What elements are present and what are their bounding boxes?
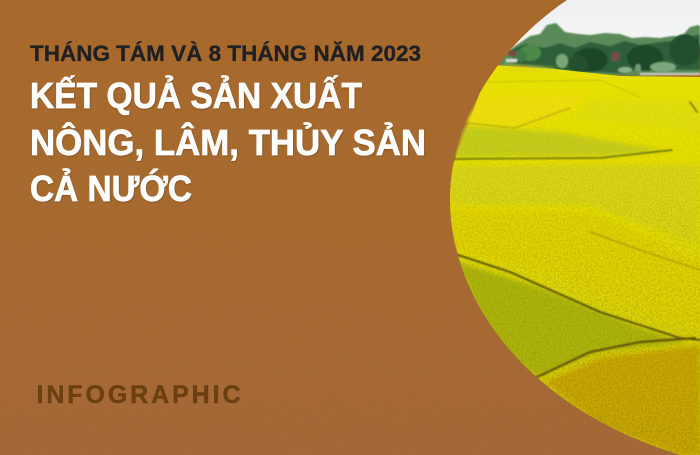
tree line [500, 23, 700, 76]
rice field photo in curved frame [440, 0, 700, 455]
field base [440, 65, 700, 455]
infographic label: INFOGRAPHIC [36, 381, 240, 409]
field furrows [454, 80, 700, 378]
title line 3: CẢ NƯỚC [30, 167, 192, 209]
field grain texture [440, 70, 700, 455]
title line 2: NÔNG, LÂM, THỦY SẢN [30, 121, 426, 163]
field parcels [450, 66, 700, 455]
main title [30, 75, 426, 209]
subtitle: THÁNG TÁM VÀ 8 THÁNG NĂM 2023 [30, 41, 421, 66]
title line 1: KẾT QUẢ SẢN XUẤT [30, 75, 362, 116]
sky [510, 0, 700, 50]
